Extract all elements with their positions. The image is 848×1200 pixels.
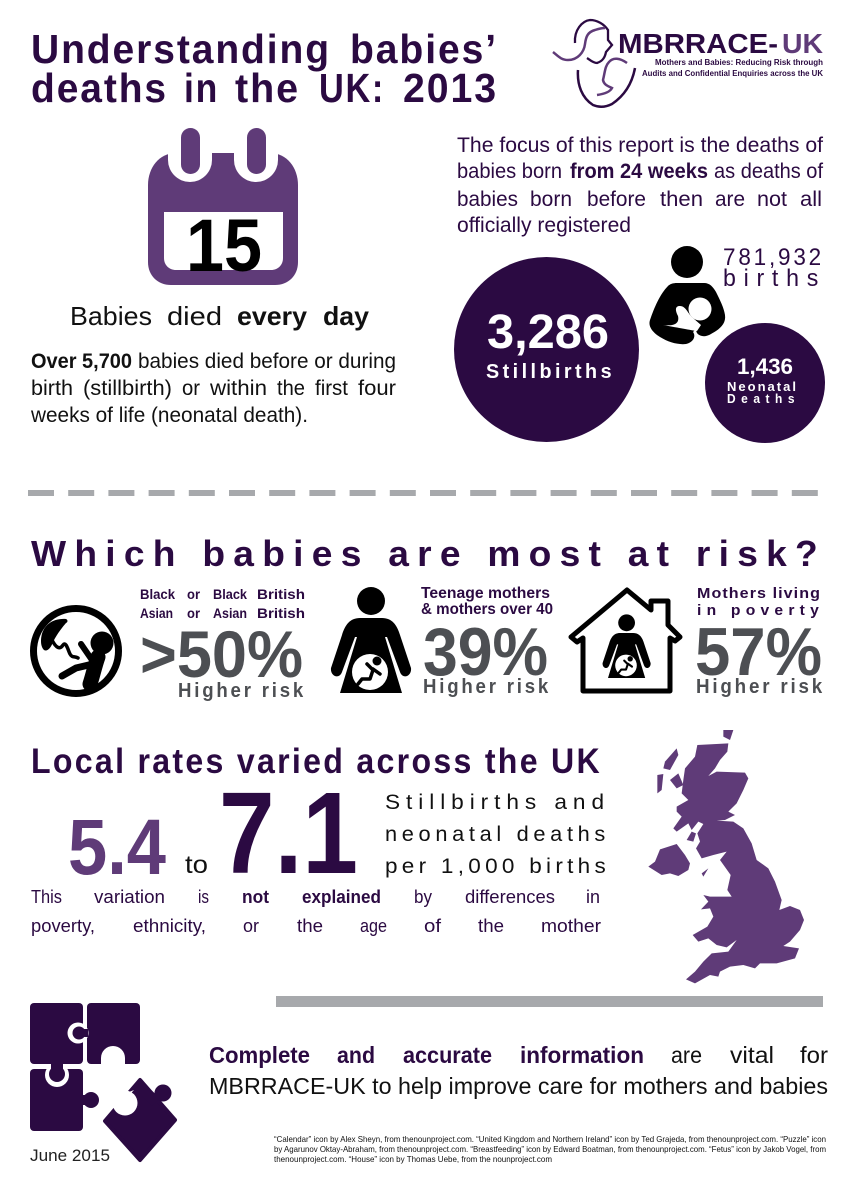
circle: neonatal deaths: Neonatal — [727, 379, 798, 394]
text: babies died every day: day — [323, 301, 370, 331]
text: icon credits: thenounproject.com. “House” icon by Thomas Uebe, from the nounproject.com — [274, 1155, 552, 1164]
text: variation not explained: This — [31, 886, 62, 907]
local rates figures: 7.1 — [219, 768, 358, 898]
map: United Kingdom — [648, 730, 804, 983]
text: variation not explained: the — [478, 915, 504, 936]
text: complete and accurate information: information — [520, 1042, 644, 1068]
text: variation not explained: ethnicity, — [133, 915, 206, 936]
text: complete and accurate information: for — [800, 1042, 828, 1068]
logo: MBRRACE-UK: UK — [782, 28, 823, 59]
heading: local rates: Local rates varied across the UK — [31, 742, 602, 781]
risk: ethnicity: or — [187, 605, 201, 621]
risk: poverty: Higher risk — [696, 676, 825, 698]
heading: which babies are most at risk: Which babies are most at risk? — [31, 533, 826, 574]
risk: ethnicity: Black — [140, 586, 175, 602]
text: babies died every day: died — [167, 301, 222, 331]
text: focus of this report: from 24 weeks — [570, 159, 708, 183]
births count — [723, 244, 826, 292]
text: focus of this report: before — [587, 187, 646, 211]
text: focus of this report: The focus of this report is the deaths of — [457, 133, 823, 157]
risk: ethnicity: Higher risk — [178, 680, 306, 702]
risk: ethnicity — [34, 586, 306, 702]
text: focus of this report: officially registered — [457, 213, 631, 237]
text: over 5,700 babies — [30, 349, 396, 427]
risk: age of mother: & mothers over 40 — [421, 601, 553, 618]
circle: neonatal deaths: Deaths — [727, 391, 800, 406]
logo: MBRRACE-UK: Audits and Confidential Enquiries across the UK — [642, 69, 823, 78]
text: over 5,700 babies: or — [182, 376, 200, 400]
text: variation not explained: of — [424, 915, 442, 936]
text: variation not explained: the — [297, 915, 323, 936]
text: over 5,700 babies: within — [209, 376, 267, 400]
title: UK: — [319, 65, 385, 111]
risk: ethnicity: Asian — [140, 605, 173, 621]
text: variation not explained: by — [414, 886, 433, 907]
local rates figures: Stillbirths and — [385, 791, 610, 814]
text: focus of this report: not — [757, 187, 787, 211]
births count: 781,932 — [723, 244, 824, 271]
circle: stillbirths — [454, 257, 639, 442]
text: complete and accurate information: are — [671, 1042, 702, 1068]
local rates figures: to — [185, 851, 208, 879]
text: complete and accurate information: Complete — [209, 1042, 310, 1068]
logo: MBRRACE-UK — [553, 20, 823, 107]
risk: ethnicity: >50% — [140, 617, 303, 691]
title: in — [184, 65, 219, 111]
text: complete and accurate information: accurate — [403, 1042, 492, 1068]
circle: stillbirths: Stillbirths — [486, 361, 615, 383]
text: focus of this report — [457, 133, 823, 237]
local rates figures: neonatal deaths — [385, 823, 610, 846]
icon: calendar — [148, 118, 298, 287]
text: variation not explained: or — [243, 915, 259, 936]
risk: age of mother: Teenage mothers — [421, 585, 550, 602]
text: focus of this report: as deaths of — [714, 159, 823, 183]
text: variation not explained: is — [198, 886, 209, 907]
risk: ethnicity: British — [257, 586, 305, 602]
risk: poverty — [571, 585, 825, 698]
circle: stillbirths: 3,286 — [487, 306, 609, 359]
risk: ethnicity: Black — [213, 586, 247, 602]
risk: poverty: in poverty — [697, 602, 824, 619]
text: focus of this report: babies — [457, 187, 518, 211]
risk: poverty: 57% — [695, 614, 822, 690]
text: complete and accurate information: MBRRACE-UK to help improve care for mothers and babies — [209, 1073, 828, 1099]
title: 2013 — [403, 65, 498, 111]
risk: ethnicity: or — [187, 586, 201, 602]
local rates figures: per 1,000 births — [385, 855, 610, 878]
icon: house with mother — [571, 590, 680, 691]
risk: poverty: Mothers living — [697, 585, 821, 602]
text: focus of this report: then — [660, 187, 703, 211]
risk: age of mother — [331, 585, 553, 698]
text: focus of this report: are — [715, 187, 745, 211]
text: complete and accurate information: and — [337, 1042, 375, 1068]
text: variation not explained: mother — [541, 915, 601, 936]
logo: MBRRACE-UK: MBRRACE- — [618, 28, 778, 59]
icon: pregnant woman — [331, 587, 411, 693]
text: over 5,700 babies: first — [315, 376, 348, 400]
text: variation not explained: in — [586, 886, 600, 907]
births count: births — [723, 265, 826, 292]
logo: MBRRACE-UK: Mothers and Babies: Reducing Risk through — [655, 58, 823, 67]
title: babies’ — [350, 26, 498, 72]
text: variation not explained: differences — [465, 886, 555, 907]
icon: puzzle — [30, 1003, 175, 1160]
circle: neonatal deaths — [705, 323, 825, 443]
risk: ethnicity: Asian — [213, 605, 247, 621]
local rates figures — [68, 768, 610, 898]
risk: age of mother: 39% — [423, 614, 548, 690]
text: icon credits: by Agarunov Oktay-Abraham, from thenounproject.com. “Breastfeeding” icon by Edward Boatman, from thenounproject.com. “Fetus” icon by Jakob Vogel, from — [274, 1145, 826, 1154]
text: complete and accurate information: vital — [730, 1042, 774, 1068]
text: over 5,700 babies: the — [277, 376, 305, 400]
title — [31, 26, 498, 111]
text: over 5,700 babies: four — [358, 376, 396, 400]
text: variation not explained: not — [242, 886, 269, 907]
text: variation not explained: poverty, — [31, 915, 95, 936]
text: over 5,700 babies: (stillbirth) — [83, 376, 172, 400]
text: babies died every day: Babies — [70, 301, 152, 331]
text: variation not explained: age — [360, 915, 387, 936]
text: variation not explained: variation — [94, 886, 165, 907]
local rates figures: 5.4 — [68, 802, 166, 891]
title: the — [235, 65, 300, 111]
text: complete and accurate information — [209, 1042, 828, 1099]
risk: ethnicity: British — [257, 605, 305, 621]
text: over 5,700 babies: birth — [31, 376, 73, 400]
icon: fetus — [34, 608, 118, 694]
title: deaths — [31, 65, 168, 111]
text: babies died every day: every — [237, 301, 308, 331]
risk: age of mother: Higher risk — [423, 676, 551, 698]
text: june 2015: June 2015 — [30, 1146, 110, 1165]
text: over 5,700 babies: weeks of life (neonatal death). — [30, 403, 308, 427]
text: over 5,700 babies: Over 5,700 — [31, 349, 132, 373]
text: focus of this report: born — [530, 187, 572, 211]
circle: neonatal deaths: 1,436 — [737, 354, 793, 379]
text: focus of this report: all — [800, 187, 822, 211]
text: variation not explained: explained — [302, 886, 381, 907]
text: icon credits: “Calendar” icon by Alex Sheyn, from thenounproject.com. “United Kingdom and Northern Ireland” icon by Ted Grajeda, from thenounproject.com. “Puzzle” icon — [274, 1135, 826, 1144]
icon: breastfeeding — [649, 246, 725, 344]
text: over 5,700 babies: babies died before or during — [138, 349, 396, 373]
title: Understanding — [31, 26, 331, 72]
icon: calendar: 15 — [186, 204, 262, 287]
text: focus of this report: babies born — [457, 159, 562, 183]
text: icon credits — [274, 1135, 826, 1164]
text: variation not explained — [31, 886, 601, 936]
